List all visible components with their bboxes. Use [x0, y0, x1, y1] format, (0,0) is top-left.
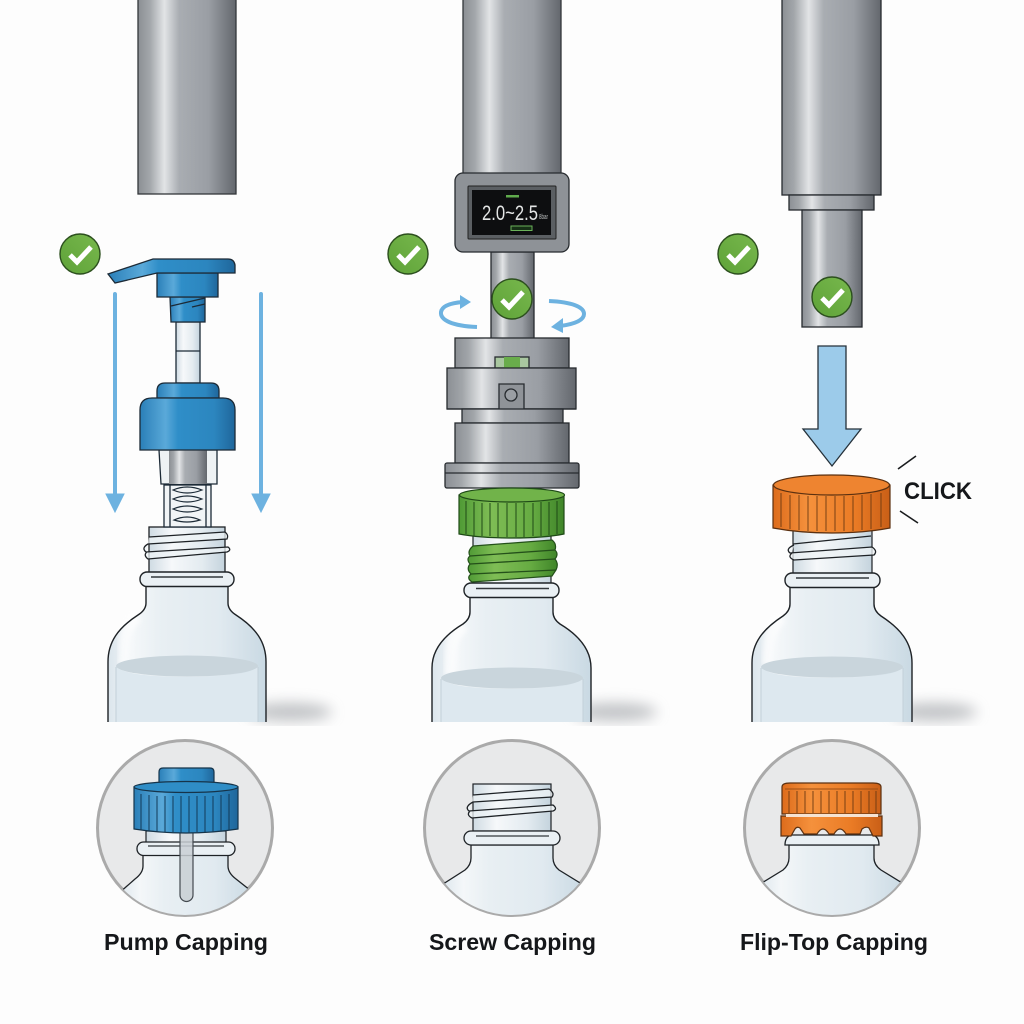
check badge: pump head	[60, 234, 100, 274]
check badge: plunger	[812, 277, 852, 317]
label: pump capping: Pump Capping	[104, 929, 268, 955]
green screw cap	[459, 488, 564, 538]
pump dispenser	[108, 259, 235, 527]
check badge: torque stem	[492, 279, 532, 319]
arrow: right downward	[252, 292, 270, 512]
torque display: 2.0~2.5	[482, 202, 538, 225]
torque stem	[491, 252, 534, 339]
bottle: screw	[432, 536, 657, 722]
capping head tube: pump	[138, 0, 236, 194]
pump capping column	[60, 0, 332, 722]
green screw threads	[468, 540, 557, 582]
bottle: flip-top	[752, 530, 977, 722]
check badge: flip-top side	[718, 234, 758, 274]
label: screw capping: Screw Capping	[429, 929, 596, 955]
detail circle: pump	[98, 740, 272, 920]
capping head tube: stepped plunger	[782, 0, 881, 327]
detail circle: flip-top	[744, 740, 920, 920]
arrow: rotate right	[549, 301, 584, 333]
flip-top capping column	[718, 0, 977, 722]
torque display	[455, 173, 569, 252]
capping chuck	[445, 338, 579, 488]
orange flip-top cap	[773, 475, 890, 533]
callout: click: CLICK	[904, 478, 973, 505]
arrow: rotate left	[441, 295, 477, 327]
label: flip-top capping: Flip-Top Capping	[740, 929, 928, 955]
torque display: 8bar	[539, 214, 548, 221]
bottle: pump	[108, 527, 332, 722]
click lines	[898, 456, 918, 523]
arrow: left downward	[106, 292, 124, 512]
arrow: press down	[803, 346, 861, 466]
screw capping column	[388, 0, 657, 722]
capping head tube: torque	[463, 0, 561, 174]
detail circle: screw	[424, 740, 600, 920]
check badge: screw side	[388, 234, 428, 274]
